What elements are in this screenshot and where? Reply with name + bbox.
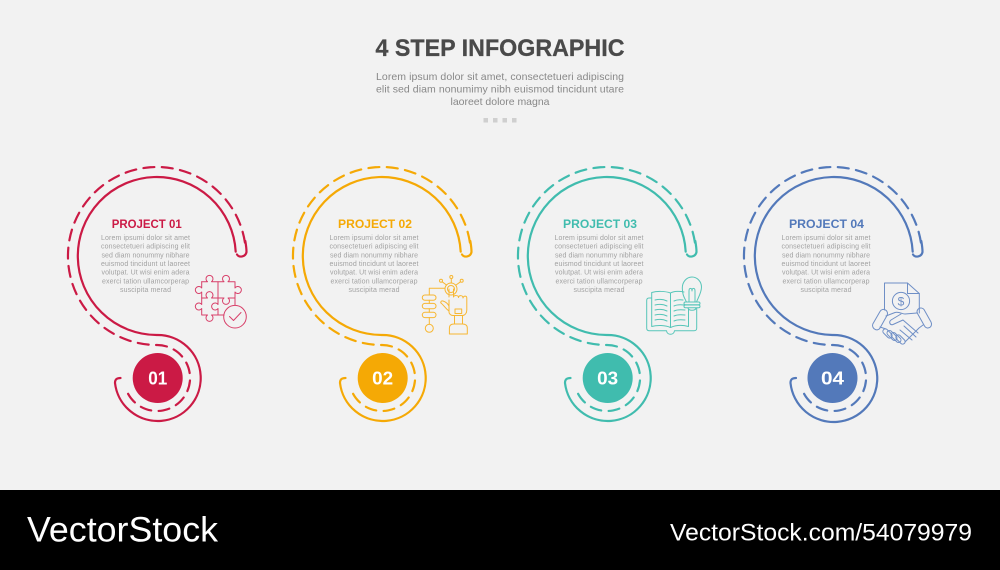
icon: document and handshake [873, 283, 932, 345]
body text 01: volutpat. Ut wisi enim adera [102, 270, 190, 277]
body text 04 [782, 235, 871, 294]
intro text [376, 71, 624, 108]
panel: project 03 [518, 167, 702, 421]
body text 02: sed diam nonummy nibhare [330, 252, 418, 259]
heading 03: PROJECT 03 [563, 217, 637, 231]
spiral outline 02 [293, 167, 472, 421]
body text 01: consectetueri adipiscing elit [101, 244, 190, 251]
number badge 04 [808, 353, 858, 403]
body text 03: euismod tincidunt ut laoreet [554, 261, 644, 268]
panel: project 04 [744, 167, 932, 422]
body text 01: sed diam nonummy nibhare [102, 252, 190, 259]
body text 01: euismod tincidunt ut laoreet [101, 261, 190, 268]
body text 03: exerci tation ullamcorperap [556, 278, 643, 285]
number badge 02 [358, 353, 408, 403]
heading 02: PROJECT 02 [338, 217, 412, 231]
body text 04: Lorem ipsumi dolor sit amet [782, 235, 871, 242]
icon: open book and light bulb [647, 277, 702, 334]
body text 02: volutpat. Ut wisi enim adera [330, 270, 418, 277]
body text 02: Lorem ipsumi dolor sit amet [330, 235, 419, 242]
body text 02: suscipita merad [348, 287, 400, 294]
icon: robot hand and flowchart [422, 276, 467, 334]
body text 04: suscipita merad [800, 287, 852, 294]
body text 02: euismod tincidunt ut laoreet [330, 261, 419, 268]
body text 01: suscipita merad [120, 287, 171, 294]
body text 04: volutpat. Ut wisi enim adera [782, 270, 870, 277]
number badge 04: 04 [821, 368, 845, 388]
icon: document and handshake: $ [898, 294, 905, 308]
number badge 01 [133, 353, 183, 403]
number badge 03: 03 [597, 368, 618, 388]
number badge 02: 02 [372, 368, 393, 388]
body text 01: exerci tation ullamcorperap [102, 278, 189, 285]
body text 02 [330, 235, 419, 294]
body text 02: exerci tation ullamcorperap [330, 278, 418, 285]
footer url: VectorStock.com/54079979 [670, 520, 972, 546]
body text 03 [554, 235, 644, 294]
heading 01: PROJECT 01 [112, 217, 182, 231]
body text 01: Lorem ipsumi dolor sit amet [101, 235, 190, 242]
body text 02: consectetueri adipiscing elit [330, 244, 419, 251]
body text 03: suscipita merad [574, 287, 625, 294]
body text 04: euismod tincidunt ut laoreet [782, 261, 871, 268]
footer logo: VectorStock [27, 511, 219, 550]
body text 01 [101, 235, 190, 294]
pagination dots [484, 118, 516, 122]
title: 4 STEP INFOGRAPHIC [376, 35, 625, 62]
body text 04: exerci tation ullamcorperap [782, 278, 870, 285]
intro text: Lorem ipsum dolor sit amet, consectetueri adipiscing [376, 71, 624, 83]
heading 04: PROJECT 04 [789, 217, 864, 231]
intro text: elit sed diam nonumimy nibh euismod tincidunt utare [376, 84, 624, 96]
icon: puzzle with check [195, 275, 246, 328]
panel: project 01 [68, 167, 246, 421]
number badge 03 [583, 353, 633, 403]
panel: project 02 [293, 167, 472, 421]
body text 03: Lorem ipsumi dolor sit amet [554, 235, 644, 242]
body text 03: volutpat. Ut wisi enim adera [555, 270, 643, 277]
body text 04: sed diam nonummy nibhare [782, 252, 870, 259]
body text 03: consectetueri adipiscing elit [554, 244, 644, 251]
intro text: laoreet dolore magna [450, 96, 550, 108]
body text 03: sed diam nonummy nibhare [555, 252, 643, 259]
body text 04: consectetueri adipiscing elit [782, 244, 871, 251]
spiral outline 01 [68, 167, 246, 421]
spiral outline 03 [518, 167, 696, 421]
footer bar [0, 490, 1000, 570]
spiral outline 04 [744, 167, 922, 422]
number badge 01: 01 [148, 368, 167, 388]
